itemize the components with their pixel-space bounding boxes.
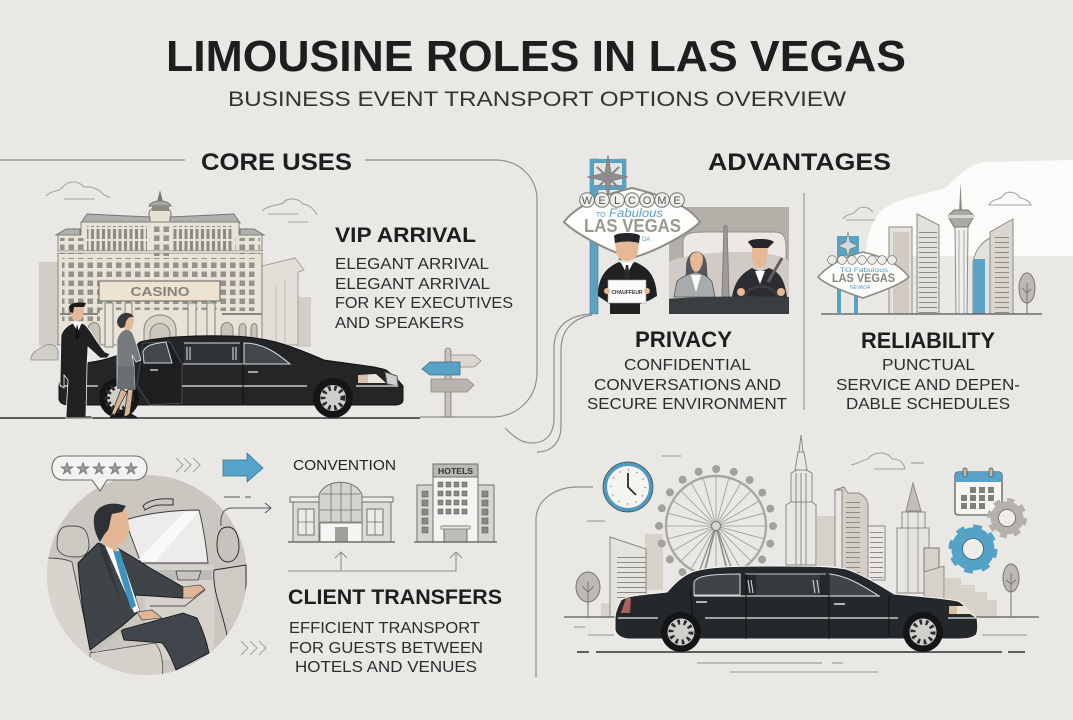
subtitle: BUSINESS EVENT TRANSPORT OPTIONS OVERVIEW: [228, 88, 846, 111]
rating stars: ★: [76, 461, 90, 478]
ground: [821, 313, 1042, 315]
wheels: [99, 378, 139, 418]
limousine: city scene: [615, 566, 978, 652]
background towers: [31, 262, 311, 360]
headlight: [949, 606, 971, 614]
sign star: [587, 155, 628, 198]
sign posts: [590, 159, 626, 314]
privacy illustration: LAS VEGAS: [584, 216, 681, 236]
text: client transfers description: FOR GUESTS BETWEEN: [289, 640, 483, 657]
heading: privacy: PRIVACY: [635, 327, 732, 352]
heading: core uses: CORE USES: [201, 149, 352, 176]
chevrons top: [176, 458, 200, 472]
trees: [576, 564, 1019, 617]
reliability illustration: [818, 182, 1042, 314]
welcome letters: O: [643, 195, 652, 207]
text: vip arrival description: ELEGANT ARRIVAL: [335, 276, 490, 293]
text: vip arrival description: FOR KEY EXECUTIVES: [335, 295, 513, 312]
grab handle: [143, 499, 173, 510]
casino hotel: [56, 190, 304, 347]
facade: [58, 222, 262, 345]
convention building: [288, 482, 395, 542]
window: [125, 510, 208, 563]
calendar icon: [955, 468, 1002, 515]
dashboard: [669, 296, 789, 314]
text: reliability description: DABLE SCHEDULES: [846, 396, 1010, 413]
speech bubble: [52, 456, 147, 491]
text: client transfers description: HOTELS AND VENUES: [295, 659, 477, 676]
welcome sign: [564, 188, 700, 258]
text: vip arrival description: [335, 256, 513, 332]
transfer arrow: [221, 497, 271, 526]
hands: [183, 585, 205, 598]
right seat: [214, 565, 246, 640]
text: reliability description: [836, 357, 1020, 413]
dome: [157, 190, 163, 202]
reliability illustration: LAS VEGAS: [832, 271, 895, 285]
panel outline: [0, 160, 537, 417]
white sky shape: [866, 160, 1073, 256]
rating stars: ★: [92, 461, 106, 478]
heading: advantages: ADVANTAGES: [708, 149, 891, 176]
chauffeur sign text: CHAUFFEUR: [611, 290, 643, 296]
wheels: [661, 612, 701, 652]
marquee: [99, 281, 220, 301]
privacy illustration: [564, 155, 789, 314]
welcome letters: C: [628, 195, 636, 207]
casino label: CASINO: [130, 284, 190, 299]
middle towers: [835, 487, 885, 580]
welcome letters: [582, 195, 681, 207]
side wing: [262, 258, 304, 345]
panel: client transfers: [46, 453, 593, 690]
rating stars: ★: [108, 461, 122, 478]
legs: [121, 613, 209, 670]
limousine: vip arrival: [59, 336, 403, 418]
tree: [1019, 273, 1035, 303]
lower connector line: [536, 487, 593, 677]
heading: vip arrival: VIP ARRIVAL: [335, 224, 476, 247]
reliability illustration: NEVADA: [850, 285, 871, 291]
open door: [137, 342, 182, 405]
chauffeur: [615, 240, 639, 261]
rating stars: [60, 461, 138, 478]
connector lines: [505, 314, 592, 452]
ground lines: [564, 616, 1039, 618]
icon: blue gear: [951, 527, 995, 571]
welcome letters: E: [673, 195, 681, 207]
privacy illustration: DA: [642, 237, 650, 243]
hotel building: [414, 464, 497, 542]
icon: grey gear: [990, 500, 1024, 536]
columns and arch: [88, 303, 257, 347]
seatbelt: [90, 629, 123, 652]
panel: city limousine scene: [564, 435, 1039, 672]
ground line: [0, 417, 420, 419]
head: [102, 508, 130, 552]
skyline back blocks: [601, 516, 997, 617]
cloud: [851, 453, 905, 469]
ferris wheel: [659, 469, 773, 583]
chauffeur figure: [60, 302, 110, 418]
roof: [81, 214, 240, 223]
text: privacy description: CONVERSATIONS AND: [594, 377, 781, 394]
left building: [610, 537, 646, 617]
buildings: [889, 227, 912, 314]
rating stars: ★: [124, 461, 138, 478]
car interior: [669, 207, 789, 314]
welcome letters: L: [614, 195, 620, 207]
blue arrow: [223, 453, 263, 482]
text: privacy description: CONFIDENTIAL: [624, 357, 751, 374]
tie: [113, 550, 136, 609]
passenger figure: [110, 313, 141, 418]
sign text: TO: [596, 212, 606, 219]
empire tower: [786, 435, 816, 565]
passenger: [684, 252, 709, 282]
rating stars: ★: [60, 461, 74, 478]
clouds: [46, 182, 317, 222]
right tower: [897, 483, 944, 600]
text: vip arrival description: AND SPEAKERS: [335, 315, 464, 332]
headlight and grille: [358, 374, 386, 383]
lapel: [98, 543, 120, 600]
text: client transfers description: EFFICIENT TRANSPORT: [289, 620, 480, 637]
text: privacy description: SECURE ENVIRONMENT: [587, 396, 787, 413]
convention label: CONVENTION: [293, 457, 396, 474]
welcome letters: E: [598, 195, 606, 207]
driver: [752, 247, 768, 268]
chevrons bottom: [241, 641, 266, 655]
welcome letters: W: [582, 195, 593, 207]
road marks: [574, 456, 1027, 672]
text: reliability description: SERVICE AND DEPEN-: [836, 377, 1020, 394]
text: vip arrival description: ELEGANT ARRIVAL: [335, 256, 489, 273]
seat: [47, 558, 99, 663]
panel: core uses: [0, 149, 537, 418]
door panel: [142, 565, 214, 660]
flow arrows: [288, 552, 462, 571]
heading: client transfers: CLIENT TRANSFERS: [288, 586, 502, 609]
title: LIMOUSINE ROLES IN LAS VEGAS: [166, 32, 906, 81]
passenger portrait: [46, 456, 247, 690]
clock icon: [603, 462, 653, 512]
trim: [618, 617, 976, 619]
windows: [694, 574, 740, 595]
text: privacy description: [587, 357, 787, 413]
tail light: [621, 598, 631, 613]
small sign: [837, 236, 858, 314]
suit: [78, 543, 183, 650]
heading: reliability: RELIABILITY: [861, 328, 995, 353]
panel: advantages: [505, 149, 1042, 452]
trim lines: [60, 385, 307, 387]
stratosphere tower: [959, 182, 962, 212]
hotels label: HOTELS: [438, 466, 473, 476]
text: reliability description: PUNCTUAL: [882, 357, 975, 374]
privacy illustration: Fabulous: [609, 206, 663, 220]
windows: [184, 343, 240, 364]
text: client transfers description: [289, 620, 483, 676]
icon: signpost: [422, 348, 481, 417]
welcome letters: M: [657, 195, 667, 207]
small sign text: TO Fabulous: [840, 268, 888, 274]
shirt: [104, 544, 140, 613]
divider: [803, 193, 805, 410]
